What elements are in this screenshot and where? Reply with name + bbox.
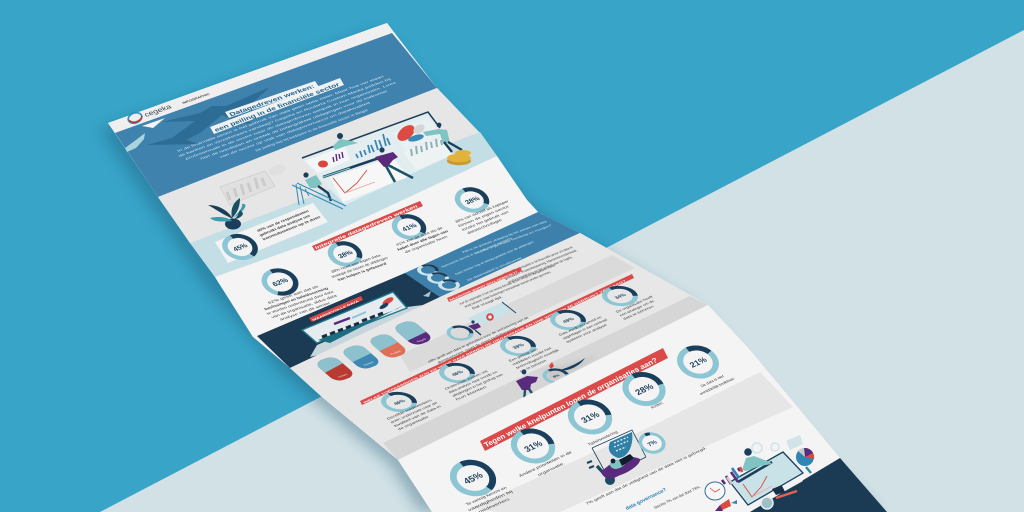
- illustration: shield and key: [587, 430, 668, 485]
- statistic: 21%: [673, 343, 736, 396]
- text: 41%: kabel door alle lagen van: [396, 229, 450, 252]
- text: 45%: [255, 207, 322, 241]
- icon: coins: [447, 150, 471, 165]
- text: 46%: data-analyse naar trends en: [448, 370, 498, 394]
- text: 38% centre: strategie die tussen de afdelingen: [330, 256, 389, 279]
- illustration: person with chart: [444, 302, 516, 342]
- panel C: pie: [392, 118, 443, 152]
- intro paragraph: [174, 72, 408, 176]
- banner: top grey: WAARVOOR WORDT DATA GEBRUIKT?: [448, 270, 519, 302]
- donut 39%: 39%: [512, 343, 527, 350]
- statistic: 31%: [563, 397, 620, 447]
- heading: een peiling in de financiële sector: [214, 82, 342, 134]
- text: 46% left: [386, 398, 445, 431]
- text: 45%: gebruikt data analyse om: [258, 214, 312, 237]
- donut 46%: 46%: [451, 370, 466, 377]
- bars stack: [722, 468, 740, 484]
- icon: pie chart: [796, 448, 814, 466]
- statistic: 46%: [435, 361, 507, 401]
- text: 38% right: binnen de eigen sector: [457, 204, 511, 228]
- person on key: [601, 457, 640, 479]
- donut 41%: 41%: [401, 223, 418, 233]
- panel: lower white band: [398, 305, 840, 512]
- intro paragraph: De peiling liep bij bedrijven in de financiële sector in België: [254, 108, 369, 152]
- text: 21%: De data is niet: [699, 373, 726, 388]
- text: below banner: Dat vraagt tijd.: [471, 295, 504, 310]
- text: 46% left: kwaliteit van de data in: [393, 405, 442, 428]
- text: top grey block: productontwikkeling en het voldoen aan de regels.: [507, 256, 574, 284]
- donut 38%: 38%: [464, 196, 481, 206]
- text: 34%: een strategie om de: [619, 300, 655, 317]
- statistic: 38% centre: [325, 240, 392, 283]
- intro paragraph: de banken en verzekeraars vandaag? Cegeka en Roularta Custom Media peilden bij: [177, 77, 392, 158]
- text: top grey block: Wat drijft organisaties in de financiële sector om data te: [503, 246, 574, 276]
- capsule blue: Klanten: [362, 360, 375, 367]
- banner: top grey: [447, 267, 522, 302]
- panel: blue box: [405, 212, 580, 297]
- panel: illustration background: [158, 88, 480, 243]
- sheet base: [108, 23, 887, 512]
- laptop illustration: [302, 292, 423, 357]
- panel: grey section: [290, 233, 708, 460]
- donut 34%: 34%: [614, 293, 629, 300]
- panel: white statistics band: [215, 156, 538, 337]
- red chart line: [743, 476, 767, 497]
- text: blue box lines: Technische kennis is nog niet overal aanwezig: [440, 236, 513, 269]
- donut 46% left: 46%: [393, 399, 408, 406]
- text: 7% sentence: 7% geeft aan dat de veiligheid van de data niet is geborgd.: [584, 446, 708, 506]
- statistic: 49%: [546, 308, 612, 344]
- statistic: 21%: onmiddellijk bruikbaar.: [698, 376, 736, 396]
- text: 46% left: de organisatie: [397, 415, 429, 431]
- banner: integratie: [312, 201, 423, 251]
- person: top: [333, 133, 358, 150]
- text: 62%: 62% geeft aan dat de: [267, 285, 320, 305]
- text: below banner: wordt beheerd, zodat beslissingen betrouwbaar kunnen worden genomen.: [463, 270, 552, 308]
- logo wordmark: cegeka: [143, 104, 173, 119]
- text: 46% left: doen onderzoek naar de: [390, 401, 438, 424]
- donut 28%: 28%: [633, 382, 656, 397]
- statistic: 41%: [389, 213, 453, 256]
- text: 41%: 41% ziet de data als de: [395, 226, 444, 247]
- text: 45% lower: Te weinig kennis en: [465, 486, 508, 507]
- text: 46%: afwijkingen in het gedrag van: [451, 373, 504, 398]
- main illustration: dashboard: [292, 112, 471, 209]
- text: blue box intro: Wat is de grootste uitdaging bij het werken met data: [461, 220, 548, 254]
- person: on ladder: [303, 172, 331, 201]
- frame: [592, 430, 646, 470]
- faded chart: [220, 162, 287, 205]
- icon: plant: [208, 198, 245, 230]
- icon: key: [587, 461, 615, 485]
- text: 62%: analyse van de sector: [279, 301, 332, 321]
- text: 38% right: inzake het gebruik van: [461, 210, 509, 232]
- text: 39%: [508, 341, 564, 373]
- heading: Datagedreven werken:: [229, 84, 316, 118]
- illustration: purple figure with streak: [516, 355, 597, 402]
- text: 38% right: datatechnologie: [466, 218, 503, 235]
- banner: long red: WELKE TOEPASSINGEN ZIJN ER VOOR DATA BINNEN DE ORGANISATIE EN HOE WORDEN ZE GEBRUIKT VANDAAG?: [362, 279, 627, 404]
- text: 39%: middelen maakt het: [512, 347, 552, 366]
- folded infographic sheet: [108, 23, 887, 512]
- heading: data governance: data governance?: [624, 487, 668, 512]
- text: 45%: 45% van de respondenten: [256, 209, 310, 233]
- text: 45% lower: [463, 485, 518, 512]
- icon: small plane: [423, 291, 431, 297]
- text: 46%: [444, 366, 507, 401]
- label infographic: INFOGRAPHIC: [181, 92, 212, 105]
- capsule purple: Regels: [416, 337, 428, 343]
- banner: integratie: Integratie datagedreven werken: [314, 204, 419, 251]
- banner: navy panel: [309, 296, 363, 322]
- text: 62%: van de organisatie, aldus data: [270, 294, 339, 319]
- banner: navy panel: WAARDEVOLLE DATA: [311, 299, 361, 322]
- capsule salmon: Product: [389, 349, 402, 356]
- monitor bar: [738, 462, 772, 482]
- panel: navy footer: [750, 458, 887, 512]
- icon: gears: [752, 443, 779, 453]
- panel B: bars: [352, 132, 398, 164]
- chart card: [323, 155, 408, 202]
- donut 7%: 7%: [646, 439, 659, 448]
- text: top grey block: gebruiken? Kostenbesparing, klantentevredenheid,: [503, 249, 578, 280]
- lower grey strip: [470, 372, 793, 512]
- text: 49%: opgeslagen in een centraal: [562, 318, 608, 340]
- text: 38% centre: 38% heeft een eigen data-: [330, 253, 384, 274]
- person at monitor: [742, 448, 772, 471]
- text: blue box lines: De datakwaliteit is onvoldoende: [466, 256, 523, 282]
- icon: clock: [705, 482, 725, 500]
- icon: plane shadow: [147, 87, 270, 145]
- text: 41%: [393, 225, 453, 256]
- text: 62%: te worden ondersteund door data: [266, 290, 336, 315]
- panel: navy: [257, 273, 440, 368]
- text: 39%: Een gebrek aan: [508, 348, 539, 363]
- intro paragraph: professionals in de sector naar de datagedreven aanpak in hun organisatie. Lees: [184, 80, 398, 161]
- heading: [210, 78, 344, 134]
- icon: shield: [609, 432, 632, 458]
- text: 38% right: 38% van zichzelf als koploper: [454, 199, 510, 224]
- text: 49%: systeem voor analyse: [565, 323, 608, 344]
- text: below banner: Voor de organisatie is het van belang dat data op een veilige en transparante manier: [458, 263, 557, 306]
- small donut: 9%: [551, 373, 561, 379]
- text: below banner: [458, 263, 564, 313]
- panel D: grey bars: [403, 138, 453, 170]
- text: 39%: om te beheren: [519, 359, 547, 373]
- text: blue box lines: Data worden nog te weinig gedeeld over de afdelingen: [454, 240, 535, 276]
- monitor stand and magnifier: [761, 478, 803, 509]
- page drop shadow: [100, 30, 880, 512]
- text: 38% centre: kan helpen is gefaseerd: [337, 262, 388, 282]
- text: grey caption: 48% geeft aan data te gebruiken voor de verbetering van de: [427, 316, 530, 364]
- panel A: [305, 146, 350, 173]
- board top bar: [302, 112, 440, 158]
- text: blue box intro: in jullie organisatie vandaag en morgen?: [474, 224, 553, 255]
- statistic: 62%: [258, 266, 343, 323]
- icon: triangle chart: [715, 499, 737, 511]
- capsule red: Kosten: [337, 373, 349, 379]
- text: 46% left: Dezelfde medewerkers: [386, 399, 433, 421]
- donut 21%: 21%: [687, 354, 709, 369]
- grey fold strip 1: [400, 255, 635, 372]
- person: right woman: [423, 123, 462, 152]
- board: [303, 113, 452, 205]
- illustration: monitor and person: [705, 435, 814, 511]
- text: 46%: Onderzoek zoeken via: [444, 369, 490, 391]
- person: purple: [375, 147, 413, 182]
- donut 38% centre: 38%: [337, 250, 354, 260]
- text: 41%: de organisatie heen: [404, 235, 448, 254]
- statistic: 38% right: [452, 186, 521, 236]
- icon: blue key small: [806, 467, 811, 473]
- donut 62%: 62%: [270, 276, 290, 288]
- grey fold strip 2: [383, 296, 708, 460]
- donut 31% lower: 31%: [522, 439, 545, 454]
- text: grey caption: dienstverlening, naast de eigen bedrijfsvoering: [437, 327, 517, 364]
- donut 45% lower: 45%: [461, 469, 486, 486]
- statistic: 46% left: [377, 390, 445, 431]
- ladder: [292, 183, 346, 209]
- text: 38% centre: [327, 252, 392, 283]
- donut 49%: 49%: [562, 317, 577, 324]
- statistic: 45%: [445, 457, 518, 512]
- card: 45% statistic: [215, 203, 328, 263]
- text: 33% sentence: 33% geeft aan een roadmap van organisatieniveaus is uitgerold.: [499, 351, 626, 417]
- icon: hand: [125, 133, 145, 152]
- statistic: 31% second: organisatie.: [536, 461, 566, 477]
- panel: header strip: [108, 23, 392, 135]
- chart: capsule bars: [314, 319, 434, 383]
- statistic: 39%: [496, 334, 564, 373]
- text: 31% upper: Tijdsinvestering.: [586, 429, 620, 447]
- text: blue box intro: [461, 219, 553, 258]
- panel: light blue floor: [190, 132, 497, 277]
- text: 34%: data te beheren: [622, 305, 655, 321]
- text: 49%: [558, 315, 612, 344]
- text: 45% lower: vaardigheden bij: [467, 490, 514, 512]
- text: 38% right: [454, 199, 521, 236]
- statistic: 34%: [598, 284, 661, 321]
- text: 39%: technologisch moeilijk: [515, 348, 560, 370]
- panel: blue header: [115, 33, 437, 197]
- small donuts: [415, 263, 462, 292]
- donut 45%: 45%: [232, 243, 249, 253]
- banner: knelpunten: Tegen welke knelpunten lopen de organisaties aan?: [482, 356, 659, 449]
- text: 34%: [615, 295, 661, 321]
- text: governance answer: Slechts 7% van dat doet 79%.: [652, 484, 702, 510]
- icon: cegeka logo: [127, 111, 143, 125]
- text: blue box lines: [440, 236, 535, 282]
- intro paragraph: In de financiële sector is het gebruik van data geen optie meer. Maar hoe ver staan: [176, 74, 385, 153]
- text: 62%: [259, 282, 343, 323]
- icon: message card: [786, 435, 803, 450]
- donut 31% upper: 31%: [579, 410, 602, 425]
- text: 49%: Data wordt verzameld en: [558, 316, 603, 337]
- small donut with figure: [444, 324, 476, 342]
- monitor: [730, 452, 803, 505]
- icon: paper plane: [142, 118, 165, 128]
- statistic: 31% second: [506, 426, 573, 478]
- text: 31% lower: Andere prioriteiten in de: [517, 450, 573, 478]
- statistic: 28%: [618, 369, 670, 410]
- intro paragraph: hier de resultaten en ontdek de belangrijkste uitdagingen voor de toekomst: [200, 89, 388, 160]
- text: 45%: kennisdomeinen op te doen: [262, 215, 322, 241]
- text: 34%: De organisatie heeft: [615, 295, 654, 314]
- banner: long red: [360, 274, 634, 405]
- intro paragraph: van de sector op vlak van datagovernance en datakwaliteit: [219, 101, 371, 159]
- text: 46%: hun klanten: [455, 385, 487, 401]
- text: 28%: Kosten.: [649, 400, 665, 410]
- text: 62%: beslissingen en beleidsvorming: [263, 287, 329, 311]
